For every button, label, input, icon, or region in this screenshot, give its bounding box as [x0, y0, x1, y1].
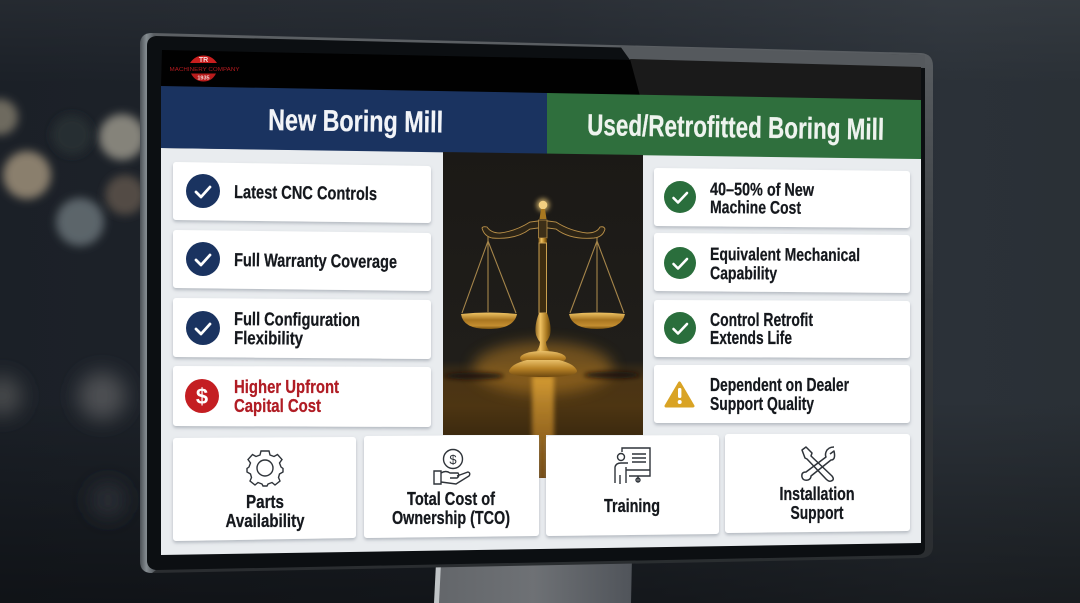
- bottom card: Parts Availability: Availability: [226, 510, 305, 531]
- header: New Boring Mill: [161, 86, 547, 154]
- icon: hand with dollar coin: [434, 450, 470, 484]
- left card 3: Full Configuration Flexibility: [176, 301, 428, 356]
- left card 2: Full Warranty Coverage: Full Warranty Coverage: [234, 249, 397, 272]
- screen: light panel: [161, 148, 921, 555]
- bottom card: Training: [549, 438, 716, 533]
- right card 1: 40–50% of New Machine Cost: 40–50% of New: [710, 179, 815, 200]
- logo: TR Machinery Company: TR: [199, 57, 208, 64]
- top black bar: [161, 50, 921, 101]
- monitor stand: [434, 556, 632, 603]
- bottom card: Total Cost of Ownership (TCO): Ownership (TCO): [392, 507, 510, 528]
- header: New Boring Mill: New Boring Mill: [268, 104, 443, 139]
- bottom card: Training: Training: [604, 495, 660, 516]
- chains: [462, 235, 624, 313]
- icon: trainer at board: [615, 448, 650, 484]
- right card 3: Control Retrofit Extends Life: Control Retrofit: [710, 310, 813, 330]
- right card 1: 40–50% of New Machine Cost: [657, 171, 907, 225]
- bottom card: Installation Support: Installation: [780, 483, 854, 504]
- left card 1: Latest CNC Controls: [176, 165, 428, 220]
- bottom card: Total Cost of Ownership (TCO): [367, 438, 536, 535]
- right card 3: Control Retrofit Extends Life: [657, 303, 907, 355]
- right card 1: 40–50% of New Machine Cost: Machine Cost: [710, 197, 801, 218]
- right card 2: Equivalent Mechanical Capability: Equivalent Mechanical: [710, 244, 860, 265]
- header: Used/Retrofitted Boring Mill: [547, 93, 921, 159]
- left card 4: Higher Upfront Capital Cost: [176, 369, 428, 424]
- beam: [482, 221, 605, 238]
- right card 4: Dependent on Dealer Support Quality: Support Quality: [710, 394, 814, 414]
- logo: TR Machinery Company: [170, 56, 240, 82]
- bottom card: Total Cost of Ownership (TCO): $: [449, 452, 457, 467]
- icon: crossed wrench and screwdriver: [802, 447, 835, 481]
- right card 3: Control Retrofit Extends Life: Extends Life: [710, 328, 792, 348]
- left card 4: Higher Upfront Capital Cost: $: [196, 384, 208, 409]
- post: [538, 220, 547, 238]
- header: Used/Retrofitted Boring Mill: Used/Retrofitted Boring Mill: [587, 109, 884, 147]
- left card 4: Higher Upfront Capital Cost: Higher Upfront: [234, 376, 339, 397]
- bottom card: Installation Support: Support: [790, 502, 844, 523]
- left card 2: Full Warranty Coverage: [176, 233, 428, 288]
- left card 4: Higher Upfront Capital Cost: Capital Cost: [234, 395, 321, 416]
- right card 2: Equivalent Mechanical Capability: [657, 236, 907, 290]
- bottom card: Parts Availability: Parts: [246, 491, 284, 512]
- icon: gear: [247, 451, 283, 486]
- left card 3: Full Configuration Flexibility: Flexibility: [234, 327, 304, 349]
- reflection glow: [473, 342, 613, 394]
- monitor bezel: [140, 33, 933, 573]
- right card 2: Equivalent Mechanical Capability: Capability: [710, 263, 777, 283]
- left card 3: Full Configuration Flexibility: Full Configuration: [234, 308, 360, 330]
- bottom card: Total Cost of Ownership (TCO): Total Cost of: [407, 488, 496, 509]
- left pan: [461, 312, 517, 329]
- right pan: [569, 312, 625, 329]
- bottom card: Installation Support: [728, 437, 907, 530]
- bottom card: Parts Availability: [176, 440, 353, 538]
- logo: TR Machinery Company: 1935: [197, 76, 210, 82]
- finial: [536, 198, 550, 212]
- right card 4: Dependent on Dealer Support Quality: Dependent on Dealer: [710, 375, 849, 395]
- base: [534, 313, 552, 354]
- left card 1: Latest CNC Controls: Latest CNC Controls: [234, 181, 377, 204]
- center photo: golden balance scale: [443, 152, 643, 481]
- logo: TR Machinery Company: MACHINERY COMPANY: [170, 67, 240, 73]
- right card 4: Dependent on Dealer Support Quality: [657, 368, 907, 420]
